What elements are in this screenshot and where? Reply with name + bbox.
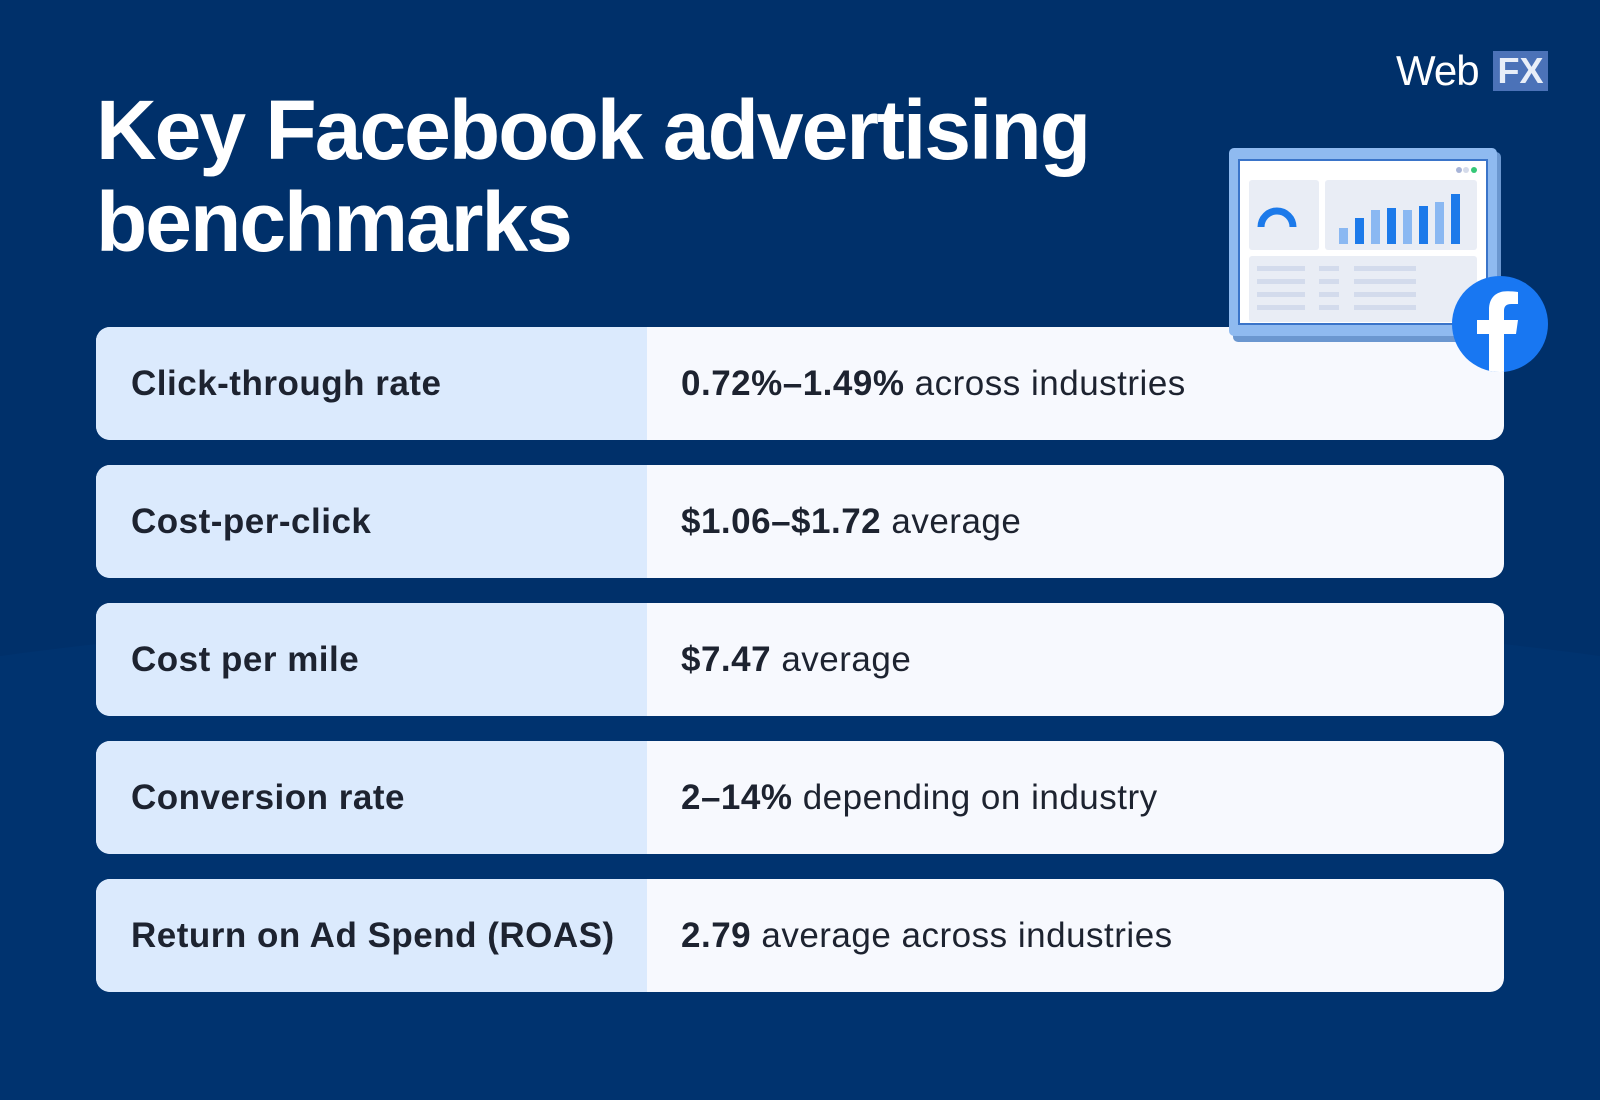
row: conversion: Conversion rate	[131, 778, 405, 817]
row: CPM: Cost per mile	[131, 640, 359, 679]
row: CTR	[96, 327, 1504, 440]
row: CPM: $7.47 average	[681, 640, 911, 679]
row: CTR: 0.72%–1.49% across industries	[681, 364, 1186, 403]
row: conversion	[96, 741, 1504, 854]
title	[96, 83, 1089, 269]
row: ROAS	[96, 879, 1504, 992]
row: ROAS: Return on Ad Spend (ROAS)	[131, 916, 615, 955]
row: CTR: Click-through rate	[131, 364, 441, 403]
title: benchmarks	[96, 175, 571, 269]
icon: facebook	[1452, 276, 1548, 372]
row: ROAS: 2.79 average across industries	[681, 916, 1173, 955]
row: conversion: 2–14% depending on industry	[681, 778, 1158, 817]
logo	[1396, 47, 1548, 94]
background wave	[0, 610, 1600, 1100]
logo: FX	[1497, 50, 1544, 91]
logo: Web	[1396, 47, 1479, 94]
row: CPC	[96, 465, 1504, 578]
row: CPC: $1.06–$1.72 average	[681, 502, 1021, 541]
illustration: dashboard monitor	[1229, 148, 1501, 342]
row: CPC: Cost-per-click	[131, 502, 371, 541]
row: CPM	[96, 603, 1504, 716]
title: Key Facebook advertising	[96, 83, 1089, 177]
